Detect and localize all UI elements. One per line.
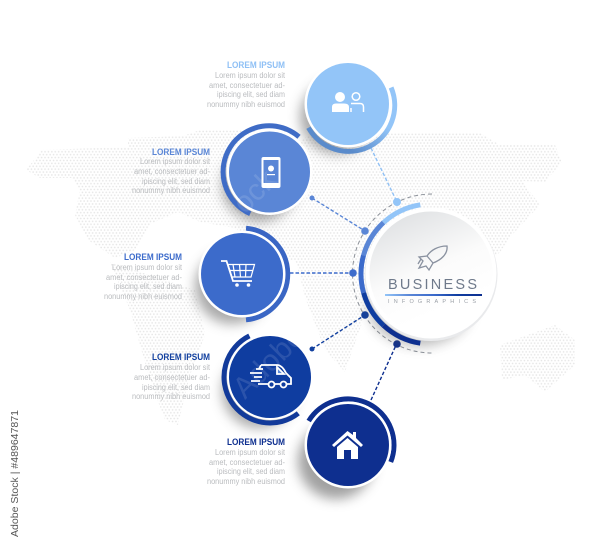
step 1 text (207, 60, 286, 109)
hub shadow (368, 262, 472, 346)
step 3 text: LOREM IPSUM (124, 252, 182, 263)
step 1 text: nonummy nibh euismod (207, 100, 285, 109)
step 4 badge (222, 334, 313, 428)
step 3 text (104, 252, 183, 301)
source credit: Adobe Stock | #489647871 (9, 410, 21, 537)
step 5 text: amet, consectetuer ad- (209, 458, 285, 467)
title: business: BUSINESS (388, 277, 477, 293)
connector: step 4 (310, 311, 369, 352)
step 2 text: Lorem ipsum dolor sit (140, 157, 211, 166)
step 2 text: ipiscing elit, sed diam (142, 177, 210, 186)
step 4 text: nonummy nibh euismod (132, 392, 210, 401)
icon: delivery truck (250, 365, 291, 388)
step 1 text: ipiscing elit, sed diam (217, 90, 285, 99)
step 1 badge (300, 60, 395, 154)
step 2 text: nonummy nibh euismod (132, 186, 210, 195)
step 2 text: LOREM IPSUM (152, 147, 210, 158)
faint stock watermark: Stock (207, 163, 284, 240)
faint stock watermark (62, 60, 499, 425)
hub multicolour arc (361, 205, 420, 343)
icon: rocket (418, 246, 447, 270)
step 4 text: amet, consectetuer ad- (134, 373, 210, 382)
faint stock watermark: Stock (62, 323, 139, 400)
step 4 text: ipiscing elit, sed diam (142, 383, 210, 392)
connector: step 3 (290, 269, 357, 277)
icon: people (332, 92, 364, 112)
icon: smartphone (262, 157, 280, 188)
step 4 text: LOREM IPSUM (152, 352, 210, 363)
subtitle: infographics: INFOGRAPHICS (388, 299, 476, 305)
step 3 badge (195, 228, 288, 324)
icon: shopping cart (221, 261, 254, 287)
hub circle (364, 208, 498, 341)
step 4 text (132, 352, 211, 401)
step 5 text: ipiscing elit, sed diam (217, 467, 285, 476)
step 1 text: Lorem ipsum dolor sit (215, 71, 286, 80)
step 5 badge (298, 399, 394, 499)
step 2 badge (222, 126, 312, 222)
step 3 text: nonummy nibh euismod (104, 292, 182, 301)
connector: step 1 (371, 148, 401, 206)
step 3 text: ipiscing elit, sed diam (114, 282, 182, 291)
step 3 text: amet, consectetuer ad- (106, 273, 182, 282)
step 3 text: Lorem ipsum dolor sit (112, 263, 183, 272)
step 4 text: Lorem ipsum dolor sit (140, 363, 211, 372)
faint stock watermark: Adobe (112, 60, 196, 145)
step 1 text: amet, consectetuer ad- (209, 81, 285, 90)
faint stock watermark: Stock (422, 348, 499, 425)
world map dotted background (26, 130, 575, 425)
step 1 text: LOREM IPSUM (227, 60, 285, 71)
step 2 text (132, 147, 211, 195)
connector: step 2 (310, 196, 369, 235)
icon: house (332, 431, 363, 459)
connector: dashed arc around hub (353, 194, 432, 353)
title underline (385, 294, 482, 296)
step 2 text: amet, consectetuer ad- (134, 167, 210, 176)
step 5 text (207, 437, 286, 486)
faint stock watermark: Adobe (227, 320, 311, 405)
step 5 text: nonummy nibh euismod (207, 477, 285, 486)
connector: step 5 (371, 340, 401, 400)
step 5 text: Lorem ipsum dolor sit (215, 448, 286, 457)
faint stock watermark: Stock (402, 113, 479, 190)
step 5 text: LOREM IPSUM (227, 437, 285, 448)
